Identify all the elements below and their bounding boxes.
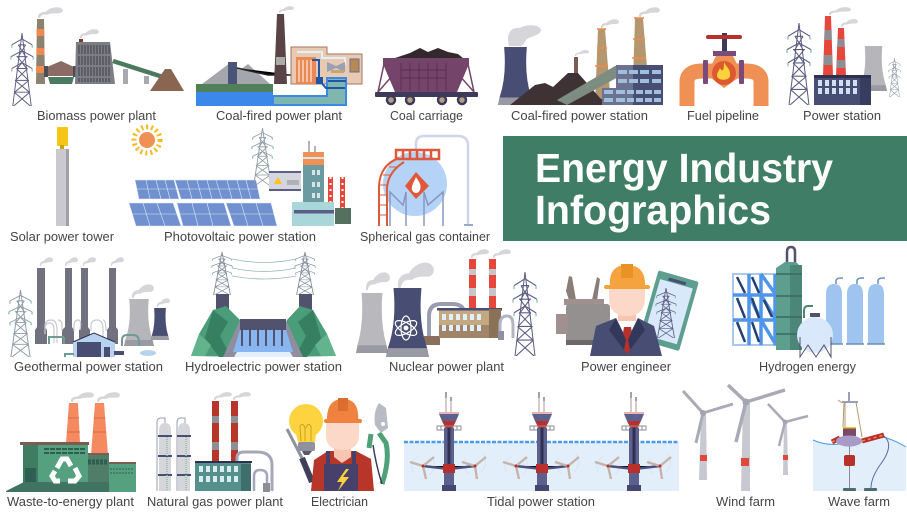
labels: Electrician xyxy=(311,494,368,509)
labels: Coal-fired power plant xyxy=(216,108,342,123)
labels xyxy=(7,108,890,509)
labels: Waste-to-energy plant xyxy=(7,494,134,509)
labels: Wave farm xyxy=(828,494,890,509)
labels: Photovoltaic power station xyxy=(164,229,316,244)
icon: photovoltaic power station xyxy=(129,128,351,226)
icon: spherical gas container xyxy=(379,136,473,226)
labels: Coal-fired power station xyxy=(511,108,648,123)
labels: Natural gas power plant xyxy=(147,494,283,509)
icon: sun xyxy=(134,127,160,153)
labels: Power station xyxy=(803,108,881,123)
icon: wave farm xyxy=(813,392,906,491)
title banner: Energy Industry xyxy=(535,145,833,191)
labels: Tidal power station xyxy=(487,494,595,509)
icon: coal-fired power plant xyxy=(196,6,362,106)
title banner xyxy=(503,136,907,241)
labels: Coal carriage xyxy=(390,108,463,123)
icon: waste-to-energy plant xyxy=(6,392,136,492)
icon: hydroelectric power station xyxy=(191,252,336,357)
icon: tidal power station xyxy=(404,392,679,491)
icon: fuel pipeline xyxy=(687,33,761,106)
labels: Hydroelectric power station xyxy=(185,359,342,374)
icon: natural gas power plant xyxy=(157,392,272,492)
labels: Fuel pipeline xyxy=(687,108,759,123)
icon: electrician xyxy=(287,398,388,491)
icon: solar power tower xyxy=(56,127,69,226)
icon: recycle symbol xyxy=(52,459,79,481)
icon: power station xyxy=(787,7,900,105)
labels: Geothermal power station xyxy=(14,359,163,374)
labels: Wind farm xyxy=(716,494,775,509)
icon: power engineer xyxy=(556,264,699,356)
title banner: Infographics xyxy=(535,187,771,233)
icon: geothermal power station xyxy=(9,257,170,357)
labels: Nuclear power plant xyxy=(389,359,504,374)
labels: Power engineer xyxy=(581,359,672,374)
icon: coal carriage xyxy=(375,48,478,104)
icon: wind farm xyxy=(683,385,808,491)
labels: Biomass power plant xyxy=(37,108,156,123)
icon: biomass power plant xyxy=(11,7,184,106)
labels: Hydrogen energy xyxy=(759,359,856,374)
icon: hydrogen energy xyxy=(733,247,885,357)
labels: Spherical gas container xyxy=(360,229,491,244)
icon: nuclear power plant xyxy=(356,249,537,357)
icon: coal-fired power station xyxy=(498,7,663,105)
labels: Solar power tower xyxy=(10,229,115,244)
